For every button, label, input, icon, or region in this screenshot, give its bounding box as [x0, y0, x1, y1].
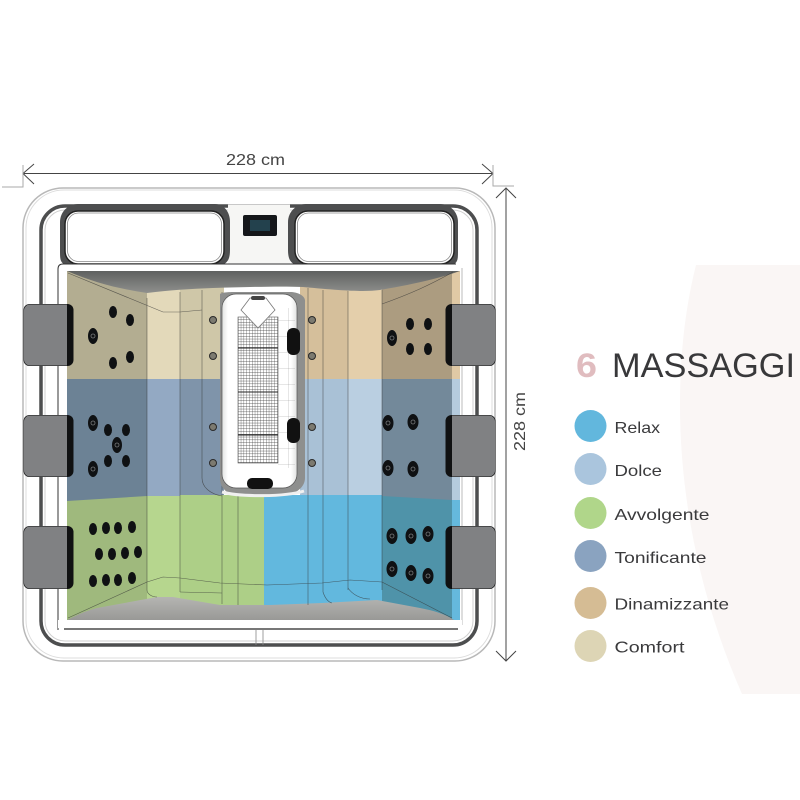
zone: comfort	[67, 271, 224, 379]
legend: tonificante	[574, 540, 707, 572]
basin outline	[58, 264, 462, 630]
massage seat panel	[222, 294, 300, 489]
footwell surround	[220, 292, 305, 495]
bottom ledge	[58, 620, 462, 628]
legend: tonificante: Tonificante	[614, 550, 707, 567]
jets: relax	[386, 526, 434, 584]
jets: avvolgente	[89, 521, 142, 587]
footwell lip	[222, 491, 304, 496]
legend: comfort	[574, 630, 685, 662]
jets	[88, 306, 434, 587]
cushion right 2	[446, 415, 496, 477]
zone: dinamizzante	[300, 271, 460, 379]
side cushions	[24, 304, 496, 589]
depth dimension: 228 cm	[512, 392, 529, 451]
cushion right 3	[446, 526, 496, 589]
background panel	[680, 265, 800, 694]
depth dimension	[496, 188, 529, 661]
bottom step	[67, 597, 460, 628]
right headrest	[288, 204, 458, 264]
zone: relax	[264, 495, 460, 625]
neck fitting	[241, 298, 275, 328]
cushion left 1	[24, 304, 74, 366]
zone: tonificante	[67, 379, 224, 501]
grid floor	[238, 317, 278, 463]
tub shell	[23, 188, 495, 661]
legend: comfort: Comfort	[614, 640, 685, 656]
heading: 6	[576, 347, 597, 385]
jet centre rings	[91, 334, 430, 578]
jets: comfort	[88, 306, 134, 369]
legend	[574, 410, 729, 662]
side jet lower	[287, 418, 300, 443]
legend: relax	[574, 410, 660, 442]
cushion right 1	[446, 304, 496, 366]
legend: avvolgente: Avvolgente	[614, 507, 710, 524]
width dimension: 228 cm	[226, 152, 285, 169]
left headrest	[60, 204, 230, 264]
foot jet	[247, 478, 273, 489]
jets: tonificante	[88, 415, 130, 477]
air nozzles	[210, 316, 316, 466]
jets: dinamizzante	[387, 318, 432, 355]
zone: dolce	[300, 379, 460, 500]
legend: dolce: Dolce	[614, 463, 662, 480]
cushion left 3	[24, 526, 74, 589]
cushion left 2	[24, 415, 74, 477]
top deck shadow	[67, 271, 460, 293]
legend: dinamizzante: Dinamizzante	[614, 596, 729, 614]
bench contour lines	[68, 272, 453, 618]
side jet upper	[287, 328, 300, 355]
spa tub top view	[23, 188, 496, 661]
legend: dinamizzante	[574, 587, 729, 619]
legend: dolce	[574, 453, 662, 485]
control panel	[228, 204, 290, 264]
zone: avvolgente	[67, 495, 264, 625]
legend: relax: Relax	[614, 420, 660, 437]
tile floor	[278, 308, 295, 468]
massage zones	[67, 271, 460, 625]
jets: dolce	[382, 414, 418, 477]
legend: avvolgente	[574, 497, 710, 529]
heading: MASSAGGI	[612, 347, 795, 385]
width dimension	[2, 152, 514, 187]
